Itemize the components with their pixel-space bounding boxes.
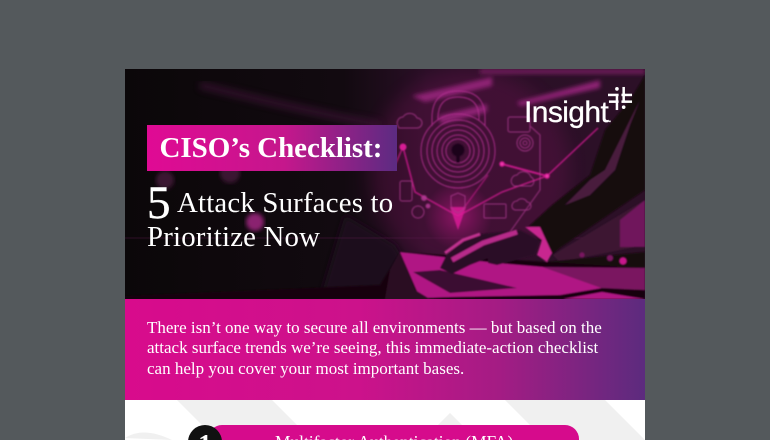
illustration: suited arm [528,69,645,255]
subtitle line 1: Attack Surfaces to [177,187,393,219]
heading subtitle [147,177,393,253]
heading banner [147,125,397,171]
icon: glowing network lines [395,128,598,230]
logo mark [608,86,632,110]
badge circle and numeral [188,425,222,440]
logo: Insight [524,86,632,129]
icon: floating security icons [397,113,540,232]
intro text: attack surface trends we’re seeing, this immediate-action checklist [147,338,598,357]
panel: hero photo [125,69,645,299]
banner title: CISO’s Checklist: [160,132,382,164]
subtitle line 2: Prioritize Now [147,221,320,253]
logo wordmark: Insight. [524,96,612,129]
illustration: hand [440,227,552,274]
panel: checklist [125,400,645,440]
intro text: There isn’t one way to secure all environments — but based on the [147,318,602,336]
panel: intro band [125,299,645,400]
large numeral: 5 [147,177,170,229]
intro text: can help you cover your most important bases. [147,359,464,378]
icon: padlock [421,91,495,188]
illustration: laptop and desk [125,252,645,299]
item 1 pill [208,425,579,440]
background pattern [126,400,644,440]
intro text [147,318,602,378]
